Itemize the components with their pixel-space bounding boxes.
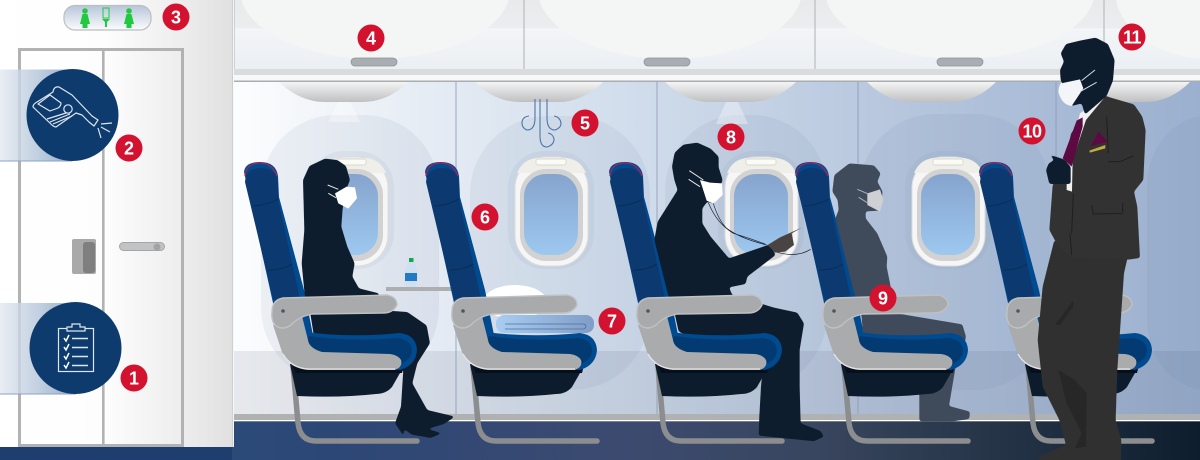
badge 8 bbox=[718, 124, 744, 150]
tray table with water bottle bbox=[386, 258, 453, 291]
badge 7 bbox=[598, 308, 626, 334]
panel: thermometer icon bbox=[0, 69, 118, 162]
shirt bbox=[1067, 95, 1107, 192]
badge 1 bbox=[120, 364, 148, 392]
passenger: man with headphones bbox=[654, 143, 824, 441]
wall panel seams bbox=[456, 82, 1056, 416]
badge 5: 5 bbox=[580, 114, 590, 134]
badge 2 bbox=[116, 134, 142, 162]
hand bbox=[1046, 154, 1071, 184]
flight attendant bbox=[1038, 38, 1146, 460]
seat fronts bbox=[272, 295, 1152, 441]
badge 11 bbox=[1118, 24, 1146, 50]
badge 1: 1 bbox=[129, 368, 139, 388]
windows bbox=[308, 151, 991, 269]
badge 10: 10 bbox=[1022, 122, 1042, 142]
badge 10 bbox=[1018, 118, 1046, 144]
badge 9: 9 bbox=[878, 288, 888, 308]
trousers bbox=[1038, 240, 1129, 460]
badge 8: 8 bbox=[726, 128, 736, 148]
icon: air flow bbox=[522, 99, 561, 147]
badge 3 bbox=[162, 4, 190, 30]
lavatory sign bbox=[64, 6, 151, 30]
badge 2: 2 bbox=[124, 138, 134, 158]
jacket bbox=[1049, 95, 1146, 260]
head bbox=[1060, 38, 1115, 115]
blanket and pillow bbox=[483, 285, 594, 333]
panel: checklist icon bbox=[0, 302, 122, 394]
badge 9 bbox=[870, 284, 896, 312]
door section bbox=[0, 0, 234, 460]
badge 7: 7 bbox=[607, 312, 617, 332]
floor bbox=[232, 421, 1200, 460]
badge 6: 6 bbox=[480, 208, 490, 228]
tie bbox=[1063, 117, 1083, 167]
numbered badges bbox=[116, 4, 1146, 392]
door handle bbox=[120, 242, 164, 251]
bin handles bbox=[351, 58, 983, 66]
badge 4: 4 bbox=[366, 28, 376, 48]
door latch bbox=[72, 239, 96, 274]
window surround panels bbox=[261, 114, 1200, 390]
badge 4 bbox=[358, 24, 384, 52]
cabin wall bbox=[232, 80, 1200, 422]
badge 6 bbox=[472, 204, 498, 230]
lower wall band bbox=[234, 351, 1200, 416]
face mask bbox=[1058, 79, 1083, 106]
pocket square bbox=[1091, 132, 1108, 146]
seat backs bbox=[244, 162, 1049, 340]
door frame bbox=[20, 50, 182, 446]
badge 3: 3 bbox=[171, 8, 181, 28]
badge 11: 11 bbox=[1123, 28, 1142, 48]
overhead bins bbox=[232, 0, 1200, 82]
ceiling vents and light cones bbox=[279, 82, 1190, 124]
passenger: woman bbox=[302, 159, 455, 438]
passenger: empty-seat ghost figure bbox=[832, 163, 970, 421]
badge 5 bbox=[572, 110, 598, 136]
